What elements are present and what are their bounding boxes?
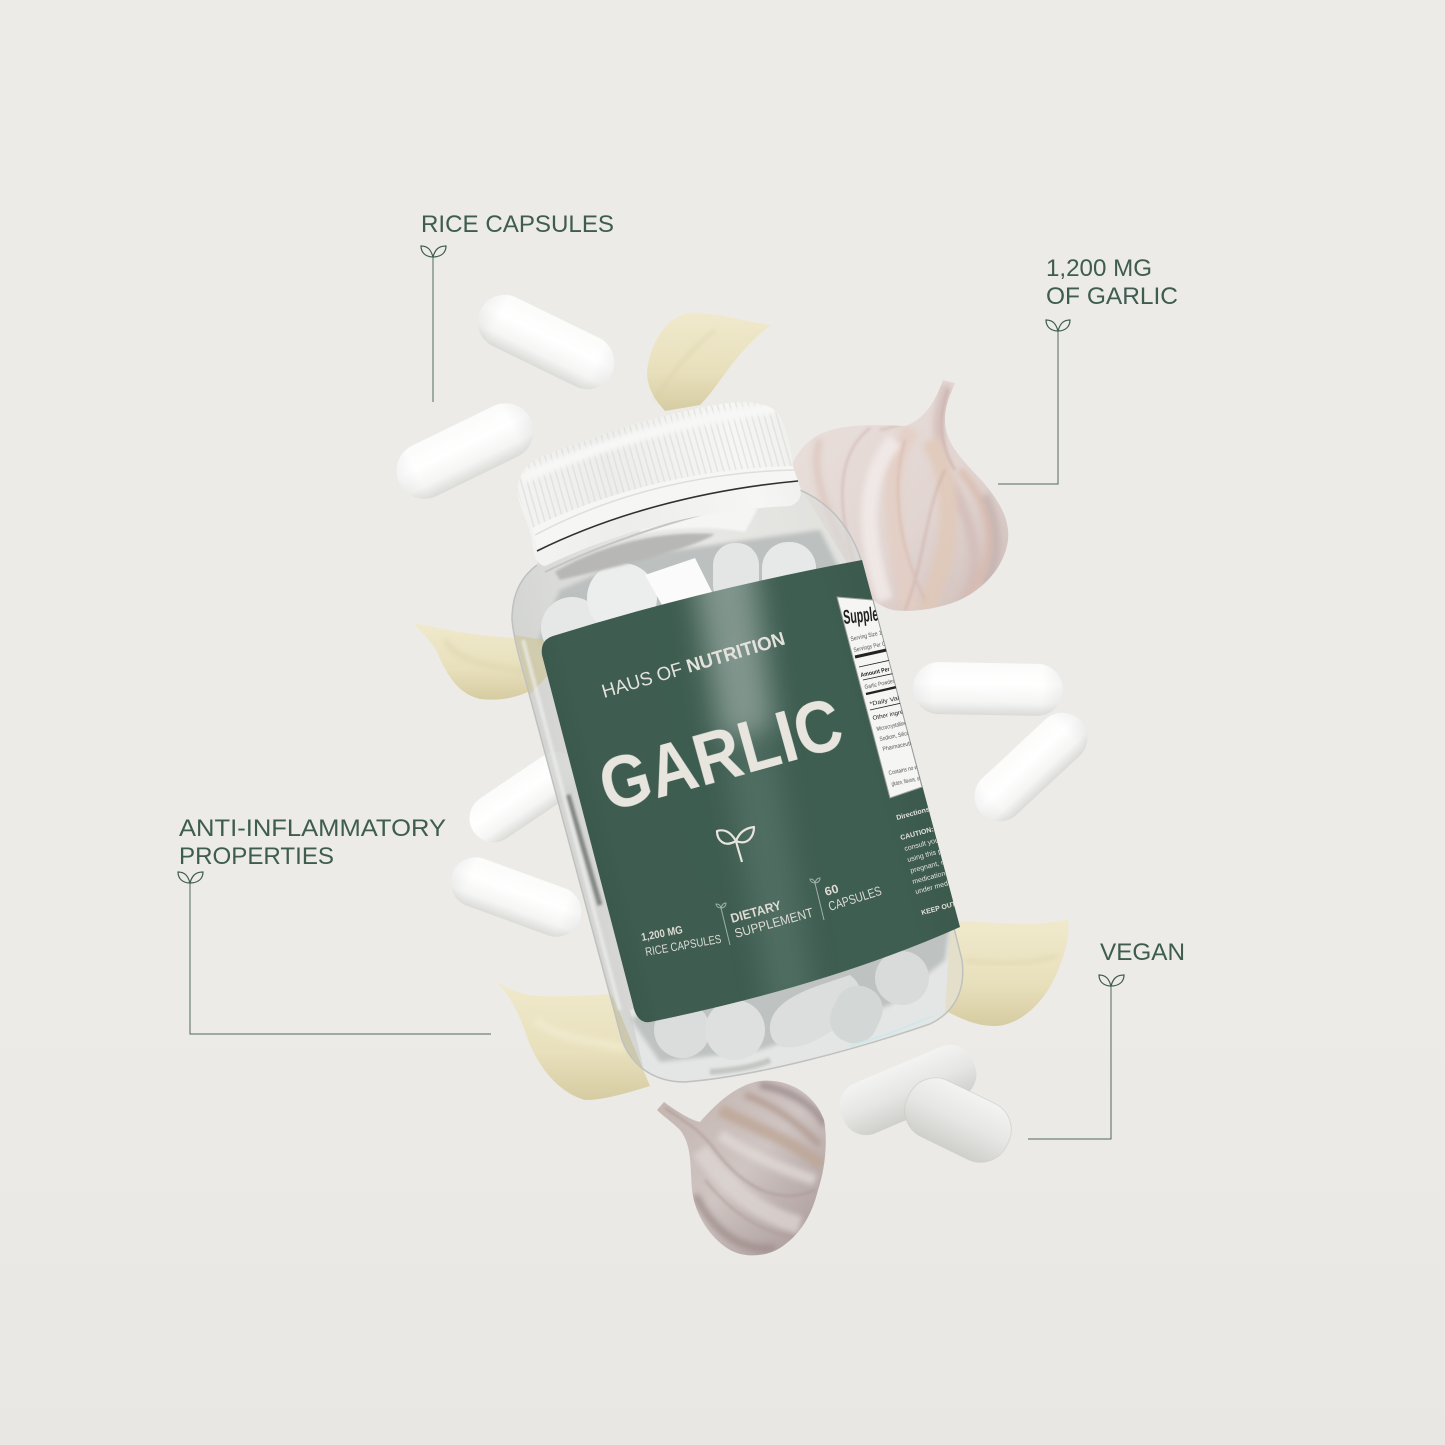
label: anti-inflammatory properties: ANTI-INFLAMMATORY <box>179 815 446 842</box>
label: 1,200 mg of garlic <box>998 255 1178 484</box>
clove: right <box>948 920 1069 1026</box>
icon: sprout on label <box>717 827 754 862</box>
supplement facts panel: Serving Size 1 capsule <box>850 627 901 643</box>
back of label seen through glass <box>568 795 600 905</box>
feature: dietary supplement: DIETARY <box>729 897 783 926</box>
clove seen through glass <box>515 635 548 695</box>
capsule: upper left <box>387 394 543 508</box>
directions and caution text: using this product if <box>907 842 967 864</box>
supplement facts panel: Other ingredients: <box>872 706 923 722</box>
jar contents and glass <box>512 492 962 1076</box>
directions and caution text: under medical care <box>915 874 974 896</box>
clove: left <box>413 623 545 700</box>
capsule: left behind jar <box>460 742 590 852</box>
label: rice capsules: RICE CAPSULES <box>421 211 614 238</box>
supplement facts panel: *Daily Value not <box>869 692 920 708</box>
capsule: bottom pair front <box>895 1068 1021 1172</box>
feature: 1,200 mg rice capsules: RICE CAPSULES <box>644 932 722 959</box>
jar mouth shadow <box>544 508 757 580</box>
garlic bulb: top right <box>785 375 1015 615</box>
bottle: green label <box>542 550 994 1022</box>
feature: 60 capsules: 60 <box>823 881 841 899</box>
bottle: ribbed white cap <box>517 402 801 566</box>
supplement facts panel: Pharmaceutical Glaze <box>882 737 933 753</box>
directions and caution text: pregnant, nursing <box>910 854 964 875</box>
supplement facts panel: Garlic Powder 1200 mg <box>864 675 914 691</box>
supplement facts panel: Contains no wheat, soy, <box>888 761 939 777</box>
directions and caution text: medication or <box>912 868 955 886</box>
bottom glass glint <box>850 1016 932 1046</box>
brand name: HAUS OF NUTRITION <box>599 629 788 703</box>
label: rice capsules <box>421 211 614 402</box>
label: anti-inflammatory properties: PROPERTIES <box>179 843 334 870</box>
divider with sprout <box>716 903 730 945</box>
capsules inside jar: bottom <box>630 932 962 1081</box>
directions and caution text: KEEP OUT OF REACH <box>921 891 994 917</box>
capsule: left lower <box>444 850 588 944</box>
feature: 1,200 mg rice capsules <box>640 924 722 959</box>
label: vegan: VEGAN <box>1100 939 1185 966</box>
supplement facts panel: gluten, flavors, or sweeteners <box>891 772 941 788</box>
capsule: right upper <box>913 662 1063 716</box>
label: 1,200 mg of garlic: OF GARLIC <box>1046 283 1178 310</box>
label: vegan <box>1028 939 1185 1139</box>
supplement facts panel: Servings Per Container <box>853 638 903 654</box>
feature: 1,200 mg rice capsules: 1,200 MG <box>640 924 684 944</box>
capsule: bottom pair back <box>832 1037 984 1143</box>
label: anti-inflammatory properties <box>178 815 491 1034</box>
icon: sprout with leader line <box>421 246 446 402</box>
icon: sprout with elbow leader line <box>998 320 1070 484</box>
directions and caution text: consult your health <box>904 831 962 853</box>
directions and caution text <box>896 808 954 915</box>
icon: sprout with elbow leader line <box>1028 975 1124 1139</box>
product name: GARLIC <box>591 683 851 827</box>
garlic bulb: bottom <box>657 1080 826 1256</box>
supplement facts panel: Amount Per Serving <box>860 663 911 679</box>
supplement facts panel: Microcrystalline Cellulose <box>876 717 927 733</box>
supplement facts panel <box>836 596 922 799</box>
clove: top <box>647 313 771 411</box>
supplement facts panel: Supplement <box>842 601 904 629</box>
feature: dietary supplement: SUPPLEMENT <box>733 905 815 941</box>
capsule: right lower <box>964 702 1098 832</box>
feature: 60 capsules: CAPSULES <box>826 883 884 914</box>
directions and caution text: Directions: Take one capsule <box>896 790 991 822</box>
supplement facts panel: Sodium, Silicon Dioxide <box>879 727 930 743</box>
capsule: top <box>469 286 623 398</box>
cap seam line <box>537 481 798 551</box>
clove: bottom left <box>495 980 650 1100</box>
label: 1,200 mg of garlic: 1,200 MG <box>1046 255 1152 282</box>
capsules inside jar: top <box>538 529 838 643</box>
icon: sprout with elbow leader line <box>178 872 491 1034</box>
directions and caution text: CAUTION: Always <box>900 820 960 842</box>
divider with sprout <box>810 878 824 920</box>
bottle: glass jar <box>500 480 980 1100</box>
